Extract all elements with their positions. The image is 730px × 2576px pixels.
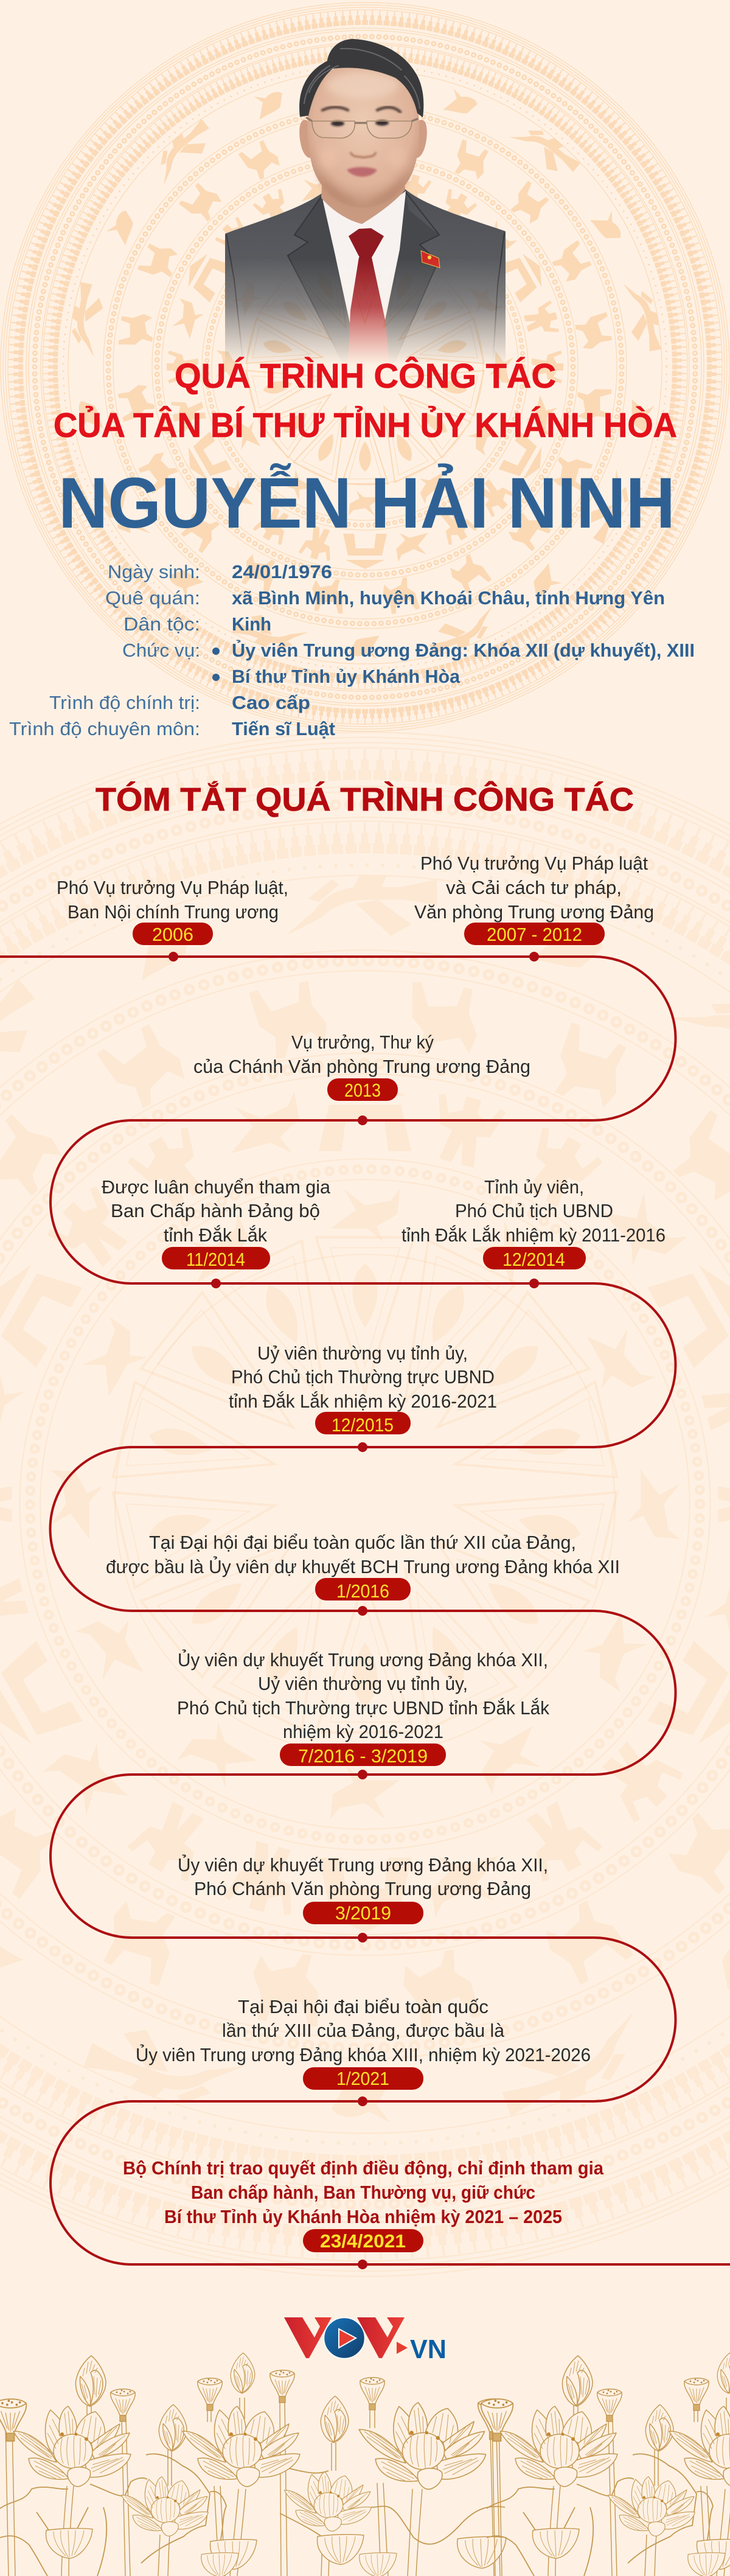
timeline item: 11/2014: Được luân chuyển tham gia	[102, 1176, 331, 1198]
profile information: Trình độ chuyên môn:	[9, 718, 200, 739]
profile information: Cao cấp	[232, 692, 310, 713]
timeline item: 12/2015: tỉnh Đắk Lắk nhiệm kỳ 2016-2021	[229, 1391, 497, 1412]
timeline item: 1/2016	[106, 1532, 620, 1616]
timeline item: 1/2016: được bầu là Ủy viên dự khuyết BCH Trung ương Đảng khóa XII	[106, 1555, 620, 1577]
timeline item: 2013: của Chánh Văn phòng Trung ương Đảng	[193, 1056, 530, 1077]
timeline item: 23/4/2021: Bí thư Tỉnh ủy Khánh Hòa nhiệm kỳ 2021 – 2025	[164, 2206, 562, 2227]
neck	[321, 173, 405, 224]
timeline item: 1/2016: 1/2016	[336, 1580, 389, 1602]
timeline item: 2013: 2013	[344, 1080, 381, 1101]
eyebrows	[322, 107, 400, 112]
timeline item: 12/2014: 12/2014	[502, 1249, 565, 1270]
title: CỦA TÂN BÍ THƯ TỈNH ỦY KHÁNH HÒA	[54, 405, 677, 445]
profile information: Kinh	[232, 613, 271, 635]
timeline item: 12/2014: Tỉnh ủy viên,	[484, 1176, 584, 1198]
profile information: Quê quán:	[105, 587, 200, 609]
timeline item: 1/2021: Ủy viên Trung ương Đảng khóa XIII, nhiệm kỳ 2021-2026	[136, 2044, 591, 2065]
timeline item: 3/2019: Phó Chánh Văn phòng Trung ương Đảng	[194, 1878, 531, 1899]
timeline item: 23/4/2021: Bộ Chính trị trao quyết định điều động, chỉ định tham gia	[123, 2157, 604, 2179]
timeline item: 12/2014: tỉnh Đắk Lắk nhiệm kỳ 2011-2016	[401, 1224, 666, 1246]
eyes	[331, 120, 389, 127]
hair	[299, 39, 423, 117]
profile information: Bí thư Tỉnh ủy Khánh Hòa	[232, 666, 461, 687]
portrait of Nguyễn Hải Ninh	[225, 39, 506, 365]
timeline item: 3/2019	[178, 1854, 548, 1942]
timeline item: 3/2019: 3/2019	[335, 1902, 391, 1924]
hair highlights	[304, 49, 420, 108]
timeline item: 2007 - 2012: 2007 - 2012	[487, 924, 582, 945]
profile information: Trình độ chính trị:	[49, 692, 200, 713]
profile information	[9, 561, 695, 739]
timeline item: 7/2016 - 3/2019: 7/2016 - 3/2019	[298, 1745, 428, 1767]
timeline item: 1/2021: Tại Đại hội đại biểu toàn quốc	[238, 1996, 488, 2017]
timeline item: 2007 - 2012: Văn phòng Trung ương Đảng	[414, 901, 654, 923]
lotus border illustration	[0, 2353, 730, 2576]
profile information: Ủy viên Trung ương Đảng: Khóa XII (dự khuyết), XIII	[232, 639, 695, 661]
timeline item: 12/2015: Phó Chủ tịch Thường trực UBND	[231, 1366, 495, 1387]
timeline item: 23/4/2021: 23/4/2021	[320, 2230, 406, 2252]
section heading: TÓM TẮT QUÁ TRÌNH CÔNG TÁC	[96, 781, 634, 818]
profile information: xã Bình Minh, huyện Khoái Châu, tỉnh Hưng Yên	[232, 587, 665, 609]
timeline item: 11/2014: 11/2014	[186, 1249, 245, 1270]
title	[54, 356, 677, 445]
profile information: Tiến sĩ Luật	[232, 718, 335, 739]
timeline item: 23/4/2021	[123, 2157, 604, 2269]
timeline item: 7/2016 - 3/2019: nhiệm kỳ 2016-2021	[283, 1721, 443, 1742]
title: QUÁ TRÌNH CÔNG TÁC	[175, 356, 556, 396]
timeline item: 12/2015	[229, 1342, 497, 1452]
timeline item: 2007 - 2012: Phó Vụ trưởng Vụ Pháp luật	[420, 853, 648, 874]
face shading	[316, 72, 410, 205]
suit, shirt and tie	[225, 189, 506, 365]
timeline item: 11/2014	[102, 1176, 331, 1288]
timeline item: 2006: 2006	[152, 924, 193, 945]
profile information: Chức vụ:	[122, 640, 200, 661]
timeline item: 2007 - 2012: và Cải cách tư pháp,	[446, 877, 622, 898]
timeline item: 11/2014: Ban Chấp hành Đảng bộ	[111, 1200, 320, 1221]
timeline item: 12/2014	[401, 1176, 666, 1288]
timeline item: 7/2016 - 3/2019: Phó Chủ tịch Thường trực UBND tỉnh Đắk Lắk	[177, 1697, 549, 1719]
timeline serpentine line	[0, 957, 730, 2264]
timeline item: 1/2021: 1/2021	[336, 2068, 389, 2089]
ears	[299, 120, 427, 158]
timeline item: 2013: Vụ trưởng, Thư ký	[291, 1031, 434, 1053]
timeline item: 2006	[57, 877, 288, 962]
timeline item: 2013	[193, 1031, 530, 1125]
mouth	[347, 167, 377, 176]
VOV.VN logo: VN	[410, 2334, 447, 2364]
timeline item: 7/2016 - 3/2019	[177, 1649, 549, 1779]
timeline item: 1/2021: lần thứ XIII của Đảng, được bầu là	[222, 2020, 505, 2041]
timeline item: 2006: Phó Vụ trưởng Vụ Pháp luật,	[57, 877, 288, 898]
timeline item: 2007 - 2012	[414, 853, 654, 962]
timeline item: 12/2015: Uỷ viên thường vụ tỉnh ủy,	[257, 1342, 468, 1364]
profile information: Dân tộc:	[123, 613, 200, 635]
VOV.VN logo	[284, 2317, 447, 2364]
timeline item: 1/2021	[136, 1996, 591, 2106]
timeline item: 12/2015: 12/2015	[332, 1414, 394, 1436]
timeline item: 1/2016: Tại Đại hội đại biểu toàn quốc lần thứ XII của Đảng,	[149, 1532, 576, 1553]
timeline item: 11/2014: tỉnh Đắk Lắk	[164, 1224, 267, 1246]
profile information: 24/01/1976	[232, 561, 332, 582]
timeline item: 3/2019: Ủy viên dự khuyết Trung ương Đảng khóa XII,	[178, 1854, 548, 1876]
glasses	[306, 117, 418, 138]
timeline item: 12/2014: Phó Chủ tịch UBND	[455, 1200, 613, 1221]
face	[307, 66, 419, 208]
nose	[350, 152, 376, 158]
timeline item: 23/4/2021: Ban chấp hành, Ban Thường vụ, giữ chức	[191, 2182, 535, 2203]
name: NGUYỄN HẢI NINH	[58, 462, 675, 543]
timeline item: 2006: Ban Nội chính Trung ương	[68, 901, 279, 923]
lapel pin	[421, 251, 440, 268]
timeline item: 7/2016 - 3/2019: Uỷ viên thường vụ tỉnh ủy,	[258, 1673, 468, 1694]
profile information: Ngày sinh:	[108, 561, 200, 582]
timeline item: 7/2016 - 3/2019: Ủy viên dự khuyết Trung ương Đảng khóa XII,	[178, 1649, 548, 1670]
